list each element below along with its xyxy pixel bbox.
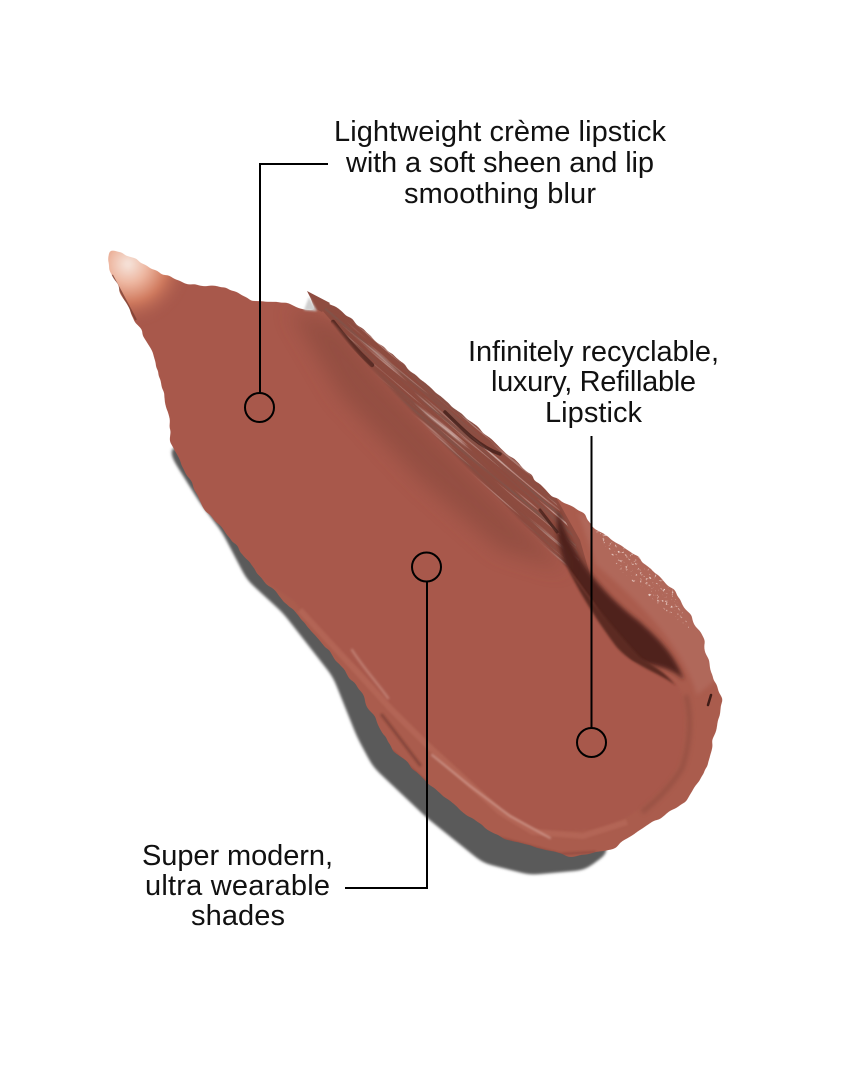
inner shading near ridge: [300, 315, 558, 563]
upper right rim lit: [578, 512, 716, 695]
pale tip: [108, 250, 176, 315]
dark left edge at tip: [112, 275, 136, 320]
text: modern shades: [142, 840, 333, 932]
swatch base (rim): [202, 298, 722, 857]
dark crevice: [557, 510, 684, 680]
dark inner rim at right: [642, 695, 689, 812]
bottom rim highlights: [352, 650, 595, 854]
callout: recyclable: [468, 336, 719, 757]
text: modern shades: shades: [191, 900, 285, 932]
torn top notch shadow: [304, 297, 317, 311]
rim specks: [596, 530, 689, 628]
text: modern shades: Super modern,: [142, 840, 333, 872]
text: recyclable: Infinitely recyclable,: [468, 336, 719, 368]
marker: [412, 552, 441, 582]
marker: [245, 393, 274, 422]
text: recyclable: luxury, Refillable: [491, 366, 696, 398]
callout: modern shades: [142, 552, 441, 932]
marker: [577, 728, 606, 757]
text: recyclable: [468, 336, 719, 429]
text: lightweight creme: [334, 116, 666, 210]
spike on ridge start: [307, 291, 330, 312]
text: modern shades: ultra wearable: [145, 870, 330, 902]
lipstick swatch: [108, 250, 722, 857]
text: recyclable: Lipstick: [545, 397, 642, 429]
ridge streak texture: [325, 308, 579, 566]
flat applied surface: [330, 320, 640, 666]
bottom rim: [300, 610, 627, 836]
text: lightweight creme: Lightweight crème lipstick: [334, 116, 666, 148]
leader line: [345, 581, 427, 888]
ridge dark creases: [333, 322, 711, 705]
cast shadow of swatch: [166, 440, 612, 875]
callout: lightweight creme: [245, 116, 666, 422]
leader line: [590, 436, 592, 728]
ridge band: [323, 304, 590, 574]
text: lightweight creme: smoothing blur: [404, 178, 596, 210]
leader line: [260, 164, 328, 393]
text: lightweight creme: with a soft sheen and lip: [345, 147, 654, 179]
dark pool by crevice: [566, 565, 676, 686]
infographic: [108, 120, 722, 926]
